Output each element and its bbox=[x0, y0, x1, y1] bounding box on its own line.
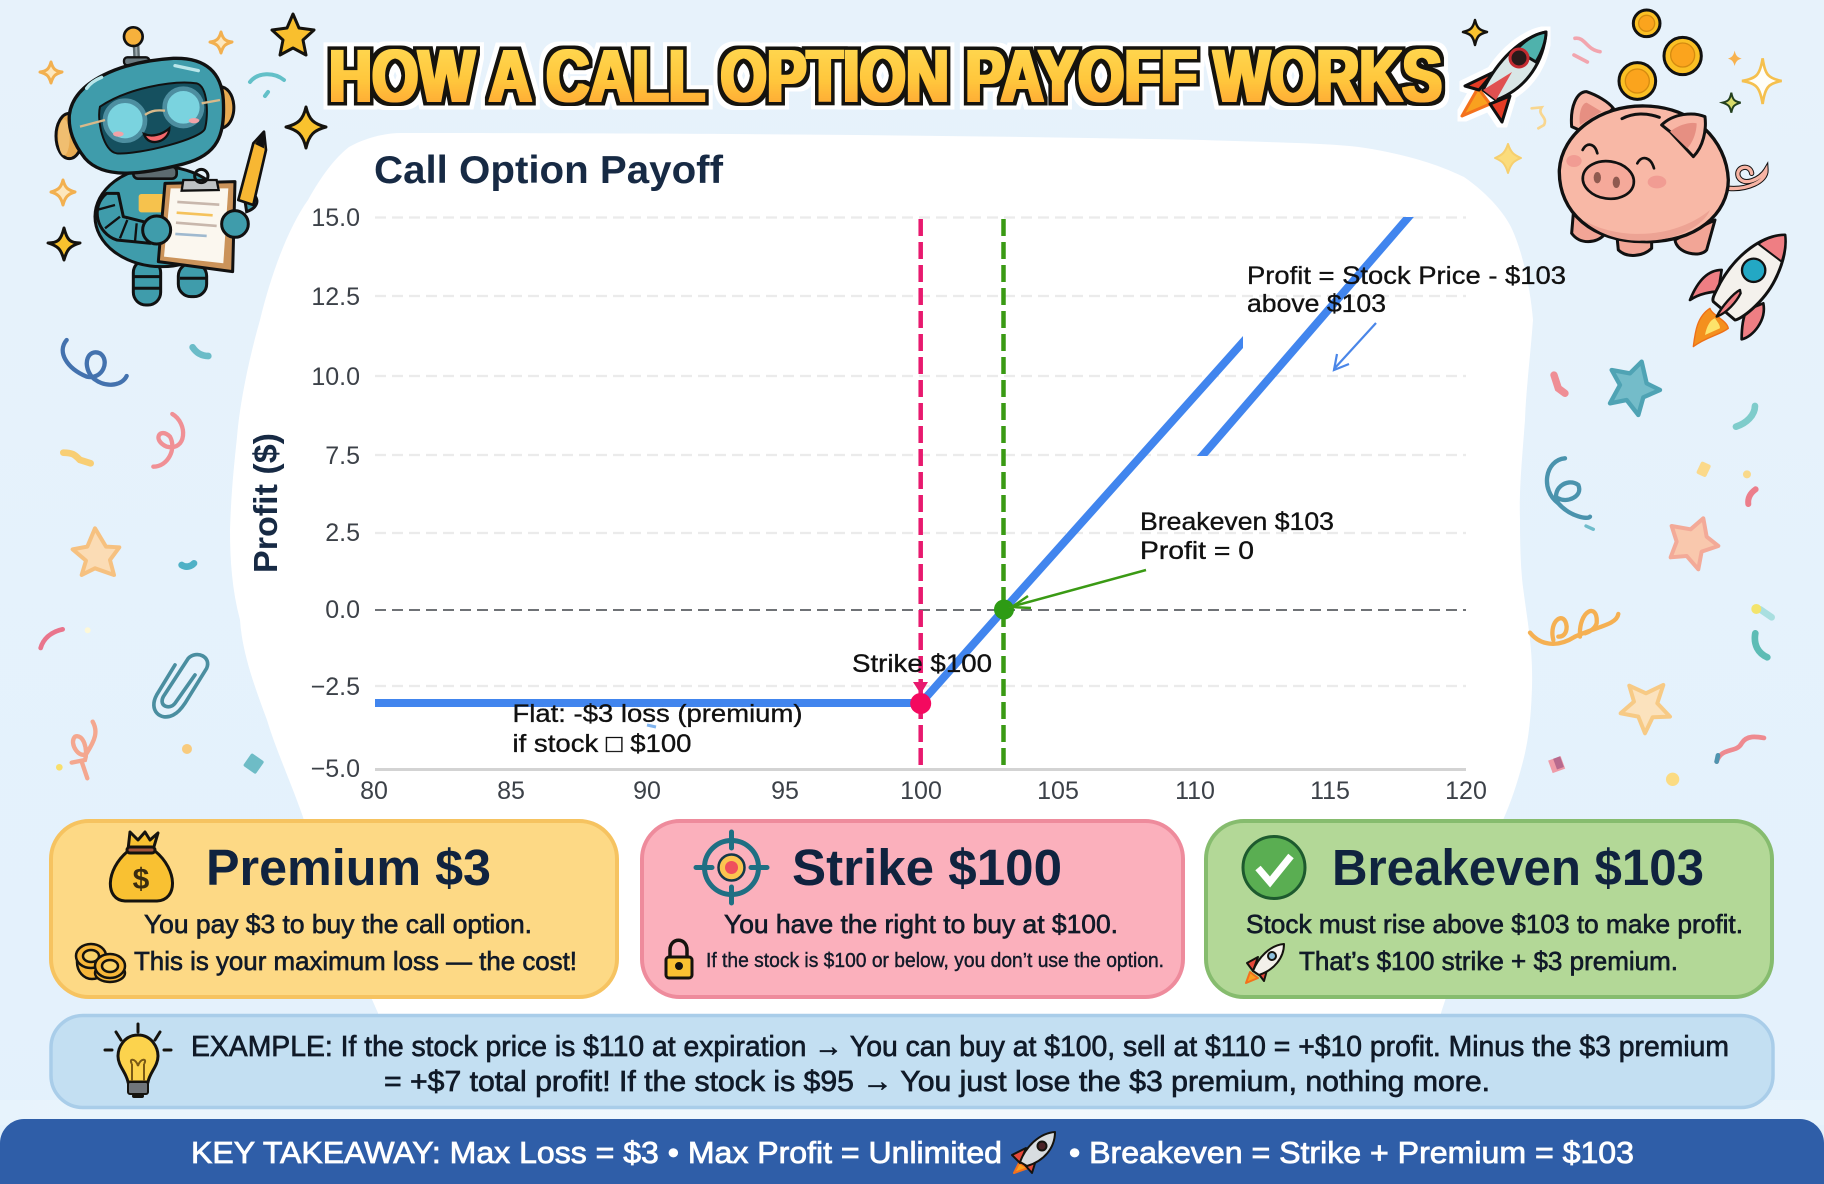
annotation: profit formula: above $103 bbox=[1247, 290, 1386, 318]
icon: padlock bbox=[666, 940, 692, 978]
pencil bbox=[238, 132, 266, 205]
y axis label: Profit ($) bbox=[247, 433, 284, 573]
panel: example callout bbox=[51, 1016, 1773, 1108]
eyes bbox=[1583, 145, 1654, 168]
x tick labels: 110 bbox=[1175, 777, 1215, 805]
heading: Premium $3 bbox=[206, 839, 491, 896]
y tick labels: 0.0 bbox=[325, 596, 360, 624]
icon: falling coins and piggy bank bbox=[1532, 10, 1785, 347]
y tick labels: 10.0 bbox=[311, 363, 360, 391]
panel: strike card bbox=[642, 821, 1183, 997]
piggy body bbox=[1559, 106, 1728, 242]
example text bbox=[191, 1031, 1729, 1098]
x tick labels: 120 bbox=[1445, 777, 1487, 805]
icon: money bag bbox=[110, 832, 173, 901]
piggy tail bbox=[1728, 167, 1766, 189]
x tick labels bbox=[360, 777, 1487, 805]
icon: rocket near piggy bbox=[1690, 235, 1785, 347]
body text: You have the right to buy at $100. bbox=[724, 909, 1118, 939]
piggy left ear bbox=[1571, 92, 1613, 133]
y tick labels: 7.5 bbox=[325, 442, 360, 470]
annotation: profit formula bbox=[1247, 262, 1566, 370]
coin slot bbox=[1622, 114, 1659, 119]
piggy right ear bbox=[1662, 114, 1705, 157]
annotation: breakeven: Profit = 0 bbox=[1140, 537, 1254, 565]
annotation: strike: Strike $100 bbox=[852, 650, 992, 678]
annotation: profit formula: Profit = Stock Price - $103 bbox=[1247, 262, 1566, 290]
x tick labels: 95 bbox=[771, 777, 799, 805]
icon: small rocket bbox=[1246, 944, 1284, 983]
robot legs bbox=[133, 260, 207, 305]
cheeks bbox=[1566, 155, 1582, 167]
icon: sparkles and stars near robot bbox=[40, 14, 326, 260]
annotation: breakeven: Breakeven $103 bbox=[1140, 508, 1334, 536]
x tick labels: 100 bbox=[900, 777, 942, 805]
neck bbox=[133, 167, 177, 179]
icon: robot mascot with clipboard bbox=[56, 27, 266, 305]
antenna bbox=[126, 43, 147, 58]
heading: Breakeven $103 bbox=[1332, 839, 1704, 896]
ears bbox=[218, 87, 234, 128]
y tick labels: 2.5 bbox=[325, 519, 360, 547]
body text: Stock must rise above $103 to make profit. bbox=[1246, 909, 1743, 939]
gridlines bbox=[375, 218, 1466, 686]
clipboard bbox=[158, 182, 235, 272]
body text: This is your maximum loss — the cost! bbox=[134, 946, 577, 976]
robot arm bbox=[97, 193, 150, 243]
icon: paper clip bbox=[154, 655, 208, 717]
annotation: breakeven bbox=[1012, 508, 1334, 608]
annotation: flat loss bbox=[512, 700, 802, 758]
zero line bbox=[375, 609, 1466, 611]
panel: breakeven card bbox=[1206, 821, 1772, 997]
visor face bbox=[99, 83, 207, 153]
body text: That’s $100 strike + $3 premium. bbox=[1299, 946, 1678, 976]
confetti decorations left bbox=[41, 340, 264, 778]
card background bbox=[1206, 821, 1772, 997]
icon: check circle bbox=[1243, 836, 1305, 898]
card background bbox=[51, 821, 617, 997]
coins bbox=[1619, 10, 1701, 99]
annotation: strike bbox=[852, 650, 992, 694]
card background bbox=[642, 821, 1183, 997]
soft lighter band below example bbox=[0, 1100, 1824, 1125]
y tick labels: −2.5 bbox=[311, 673, 360, 701]
callout background bbox=[51, 1016, 1773, 1108]
title: how a call option payoff works: HOW A CALL OPTION PAYOFF WORKS bbox=[329, 34, 1442, 118]
annotation: flat loss: Flat: -$3 loss (premium) bbox=[512, 700, 802, 728]
white chart backdrop blob bbox=[230, 133, 1533, 1040]
head bbox=[69, 58, 224, 173]
icon: title rocket bbox=[1462, 32, 1546, 122]
annotation: flat loss: if stock □ $100 bbox=[512, 730, 692, 758]
piggy feet bbox=[1572, 213, 1715, 255]
hands bbox=[143, 216, 171, 244]
icon: light bulb bbox=[105, 1024, 171, 1098]
x tick labels: 105 bbox=[1037, 777, 1079, 805]
takeaway text left: KEY TAKEAWAY: Max Loss = $3 • Max Profit = Unlimited bbox=[191, 1135, 1002, 1170]
icon: coins bbox=[76, 944, 125, 982]
confetti squiggles bbox=[1574, 38, 1600, 62]
y tick labels: 15.0 bbox=[311, 204, 360, 232]
strike dot bbox=[910, 693, 931, 714]
body text: You pay $3 to buy the call option. bbox=[144, 909, 532, 939]
smile and cheeks bbox=[144, 128, 169, 142]
breakeven dot bbox=[994, 600, 1014, 620]
panel: key takeaway banner bbox=[0, 1119, 1824, 1184]
breakeven vertical line bbox=[1001, 219, 1006, 769]
example text: EXAMPLE: If the stock price is $110 at expiration → You can buy at $100, sell at $110 = +$10 profit. Minus the $3 premium bbox=[191, 1031, 1729, 1063]
icon: money bag: $ bbox=[133, 863, 150, 896]
panel: premium card bbox=[51, 821, 617, 997]
strike vertical line bbox=[918, 219, 923, 769]
chart heading: Call Option Payoff bbox=[374, 149, 724, 192]
confetti decorations right bbox=[1530, 362, 1772, 786]
snout bbox=[1580, 158, 1636, 202]
x tick labels: 115 bbox=[1310, 777, 1350, 805]
x axis line bbox=[375, 768, 1466, 771]
payoff line bbox=[375, 198, 1425, 703]
y tick labels: −5.0 bbox=[311, 755, 360, 783]
x tick labels: 80 bbox=[360, 777, 388, 805]
y tick labels: 12.5 bbox=[311, 283, 360, 311]
x tick labels: 90 bbox=[633, 777, 661, 805]
body text small: If the stock is $100 or below, you don’t use the option. bbox=[706, 950, 1164, 972]
sparkles bbox=[1742, 58, 1782, 104]
x tick labels: 85 bbox=[497, 777, 525, 805]
example text: = +$7 total profit! If the stock is $95 → You just lose the $3 premium, nothing more. bbox=[384, 1066, 1490, 1098]
icon: sparkles near title rocket bbox=[1463, 20, 1521, 173]
takeaway text right: • Breakeven = Strike + Premium = $103 bbox=[1069, 1135, 1634, 1170]
glasses bbox=[105, 101, 145, 141]
robot torso bbox=[95, 167, 228, 267]
chart: call option payoff bbox=[247, 149, 1566, 805]
icon: banner rocket bbox=[1012, 1132, 1055, 1173]
heading: Strike $100 bbox=[792, 839, 1062, 896]
banner background bbox=[0, 1119, 1824, 1184]
icon: target bbox=[696, 832, 767, 903]
y tick labels bbox=[311, 204, 360, 783]
